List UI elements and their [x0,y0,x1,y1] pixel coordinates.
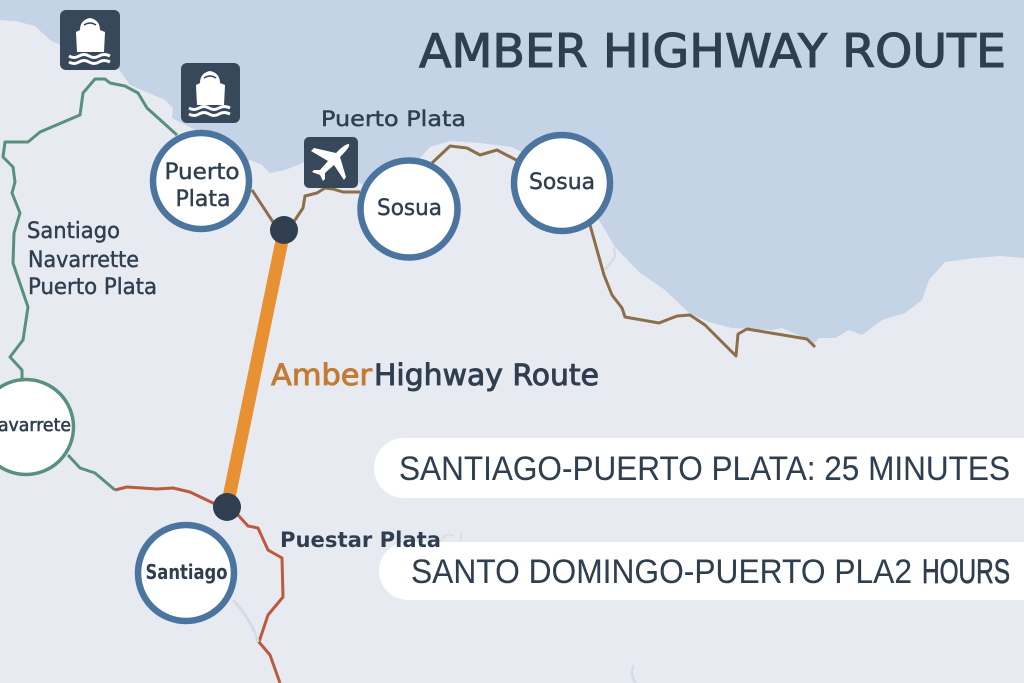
icon: ferry 2 [181,63,240,123]
brown route west [252,188,360,231]
brown route south coast [590,225,815,356]
icon: airplane [304,137,358,188]
label: Puestar Plata: Puestar Plata [280,528,441,552]
faint inlet [605,247,615,270]
city: Santiago [138,525,234,621]
label: towns list: Navarrette [28,248,139,273]
green route lower [68,455,115,490]
city: Sosua east [514,135,610,231]
title: AMBER HIGHWAY ROUTE [419,24,1006,78]
city: Sosua west: Sosua [377,196,442,221]
label: amber highway route: Amber [271,358,372,392]
city: Puerto Plata: Plata [176,187,230,212]
junction south [213,493,241,521]
pill: Santo Domingo to Puerto Plata [379,542,1024,600]
city: Sosua east: Sosua [529,170,595,195]
city: Puerto Plata: Puerto [164,160,240,185]
pill: Santiago to Puerto Plata [374,438,1024,498]
label: towns list: Santiago [27,219,120,244]
pill: Santo Domingo to Puerto Plata: SANTO DOMINGO-PUERTO PLA2 [411,553,912,591]
label: Puerto Plata: Puerto Plata [321,107,466,131]
city: Sosua west [360,160,458,258]
label: amber highway route: Highway Route [374,358,599,392]
city: Santiago: Santiago [146,560,228,584]
faint river [233,600,258,642]
city: Navarrete [0,380,74,474]
green route [3,79,177,380]
icon: ferry 1 [60,10,120,70]
brown route east [432,146,520,163]
label: amber highway route [271,358,599,392]
label: towns list: Puerto Plata [28,275,157,300]
sea area [0,0,1024,345]
ghost mark behind label [441,533,461,541]
faint river south [632,665,636,683]
junction north [270,216,298,244]
red route [115,487,283,683]
amber highway line [227,231,284,507]
label: towns list [27,219,157,300]
city: Puerto Plata [153,133,249,229]
